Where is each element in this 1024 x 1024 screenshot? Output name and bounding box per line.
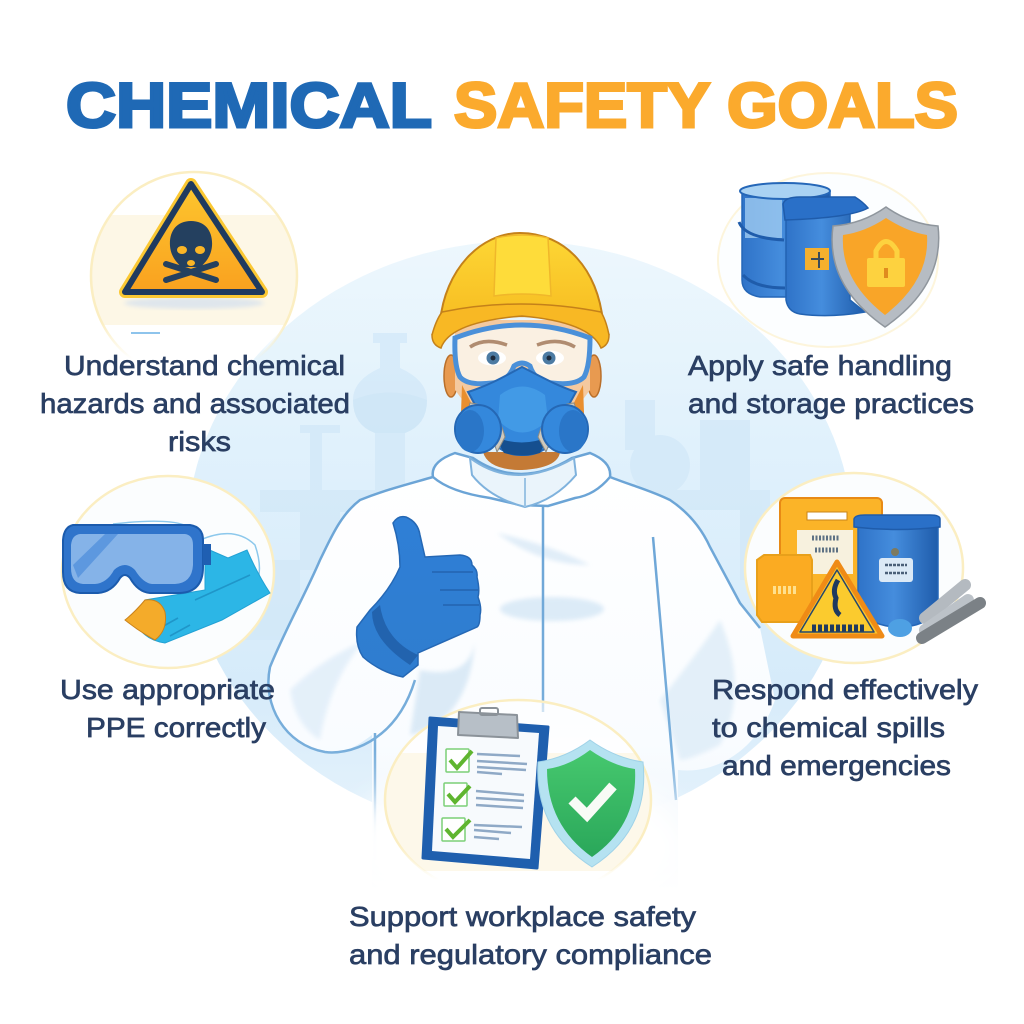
- label: PPE: [60, 674, 275, 743]
- suit collar: [433, 453, 610, 506]
- suit shading: [290, 533, 735, 760]
- background circle with lab silhouettes: [187, 241, 853, 833]
- label: spills: to chemical spills: [712, 712, 945, 743]
- body lines: [375, 537, 676, 860]
- zipper line: [542, 507, 544, 712]
- label: hazards: risks: [168, 426, 231, 457]
- goggles: [455, 325, 590, 384]
- panel: PPE: [60, 476, 275, 743]
- icon: spill kit: [745, 473, 980, 663]
- label: handling: [688, 350, 974, 419]
- ears: [444, 355, 458, 397]
- label: spills: and emergencies: [722, 750, 951, 781]
- label: PPE: PPE correctly: [86, 712, 266, 743]
- icon: barrels and shield: [718, 173, 939, 347]
- label: compliance: [349, 901, 712, 970]
- title: [66, 71, 958, 141]
- label: spills: Respond effectively: [712, 674, 978, 705]
- label: compliance: Support workplace safety: [349, 901, 696, 932]
- head: [455, 320, 590, 430]
- icon: hazard circle: [90, 170, 298, 354]
- label: hazards: [40, 350, 350, 457]
- label: spills: [712, 674, 978, 781]
- title: SAFETY GOALS: [454, 71, 958, 141]
- label: compliance: and regulatory compliance: [349, 939, 712, 970]
- panel: spills and emergencies: [712, 473, 980, 781]
- icon: clipboard and shield: [384, 698, 652, 875]
- worker figure: [268, 233, 775, 890]
- panel: handling and storage: [688, 173, 974, 419]
- title: CHEMICAL: [66, 71, 432, 141]
- icon: goggles and glove: [62, 476, 274, 668]
- label: handling: and storage practices: [688, 388, 974, 419]
- respirator mask: [455, 367, 588, 456]
- suit outline: [268, 477, 760, 752]
- hard hat: [432, 233, 609, 348]
- thumbs up glove: [357, 517, 481, 677]
- label: handling: Apply safe handling: [688, 350, 952, 381]
- neck: [483, 452, 560, 470]
- panel: compliance: [348, 700, 712, 970]
- label: PPE: Use appropriate: [60, 674, 275, 705]
- protective suit: [268, 477, 775, 890]
- label: hazards: hazards and associated: [40, 388, 350, 419]
- label: hazards: Understand chemical: [64, 350, 345, 381]
- glow: [348, 770, 688, 920]
- panel: understand hazards: [40, 172, 350, 457]
